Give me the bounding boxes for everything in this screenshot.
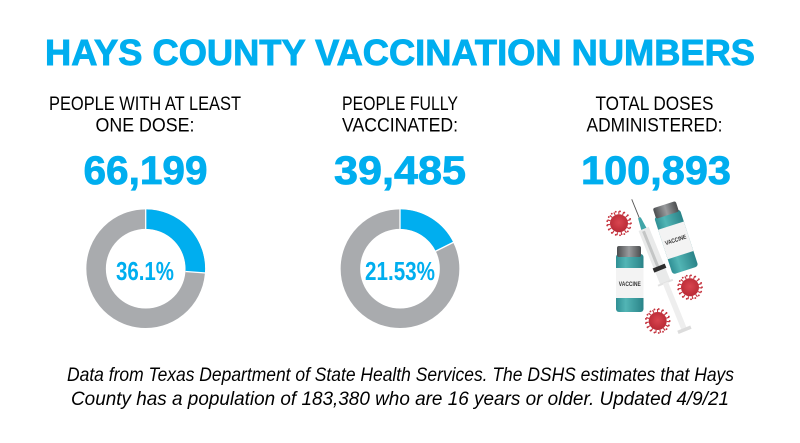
heading: people with at least one dose xyxy=(49,93,241,136)
donut chart: 21.53% xyxy=(350,208,455,318)
heading: total doses administered xyxy=(586,93,722,136)
heading: total doses administered: TOTAL DOSES xyxy=(596,93,714,115)
heading: people with at least one dose: ONE DOSE: xyxy=(96,114,194,136)
number: total doses: 100,893 xyxy=(581,149,731,193)
heading: people with at least one dose: PEOPLE WITH AT LEAST xyxy=(49,93,241,115)
heading: people fully vaccinated: PEOPLE FULLY xyxy=(342,93,458,115)
heading: total doses administered: ADMINISTERED: xyxy=(586,114,722,136)
illustration: vaccine vials, syringe and virus xyxy=(607,196,702,334)
icon: vaccine vial left: VACCINE xyxy=(619,282,641,288)
donut chart: 36.1% xyxy=(96,208,206,318)
heading: people fully vaccinated xyxy=(342,93,458,136)
icon: virus bottom xyxy=(646,309,670,333)
heading: people fully vaccinated: VACCINATED: xyxy=(342,114,458,136)
footnote: County has a population of 183,380 who are 16 years or older. Updated 4/9/21 xyxy=(71,389,729,410)
icon: virus top left xyxy=(607,211,631,235)
footnote xyxy=(67,365,734,410)
title: HAYS COUNTY VACCINATION NUMBERS xyxy=(45,32,755,73)
number: fully vaccinated: 39,485 xyxy=(334,149,466,193)
number: at least one dose: 66,199 xyxy=(84,149,208,193)
donut chart: 36.1%: 36.1% xyxy=(116,256,174,286)
footnote: Data from Texas Department of State Health Services. The DSHS estimates that Hays xyxy=(67,365,734,386)
donut chart: 21.53%: 21.53% xyxy=(365,256,435,286)
icon: syringe xyxy=(624,196,692,334)
icon: virus right xyxy=(678,275,702,299)
icon: vaccine vial right: VACCINE xyxy=(665,235,687,247)
